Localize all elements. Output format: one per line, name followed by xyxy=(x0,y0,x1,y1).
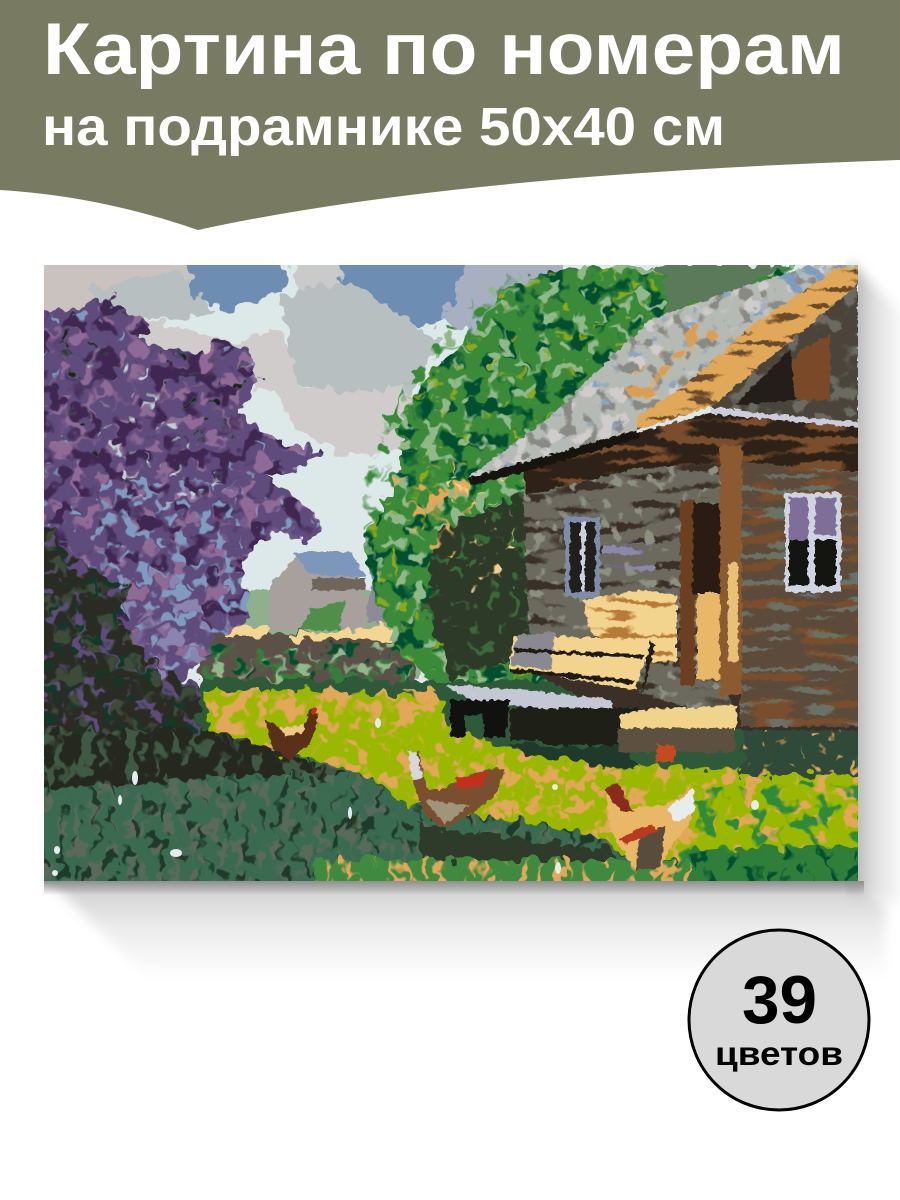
left window xyxy=(565,517,600,598)
hen 1 xyxy=(265,707,318,760)
right wall xyxy=(740,440,860,727)
sunlit steps xyxy=(583,590,677,662)
canvas shadow xyxy=(44,262,900,980)
hen 3 xyxy=(604,783,695,870)
fence and shrubs xyxy=(196,620,416,686)
hen 2 xyxy=(408,750,505,828)
header banner xyxy=(0,0,900,230)
eaves logs xyxy=(525,410,860,495)
wooden house xyxy=(468,264,860,730)
overhang strip xyxy=(710,408,860,428)
flower speckles xyxy=(52,718,759,876)
door and posts xyxy=(680,500,695,685)
ground xyxy=(36,680,870,890)
badge: 39 colours xyxy=(689,930,869,1110)
lilac bush xyxy=(44,292,324,736)
hens xyxy=(265,707,695,870)
distant house xyxy=(242,551,421,680)
title: Картина по номерам xyxy=(43,9,845,90)
left wall xyxy=(522,463,732,708)
painting xyxy=(30,255,870,890)
bench xyxy=(445,632,737,762)
green tree xyxy=(360,262,800,700)
badge label: цветов xyxy=(715,1035,843,1072)
sky xyxy=(30,255,570,455)
subtitle: на подрамнике 50х40 см xyxy=(42,97,725,157)
right window xyxy=(785,493,841,592)
gable xyxy=(710,283,858,425)
roof xyxy=(468,264,860,478)
badge number: 39 xyxy=(742,962,817,1038)
